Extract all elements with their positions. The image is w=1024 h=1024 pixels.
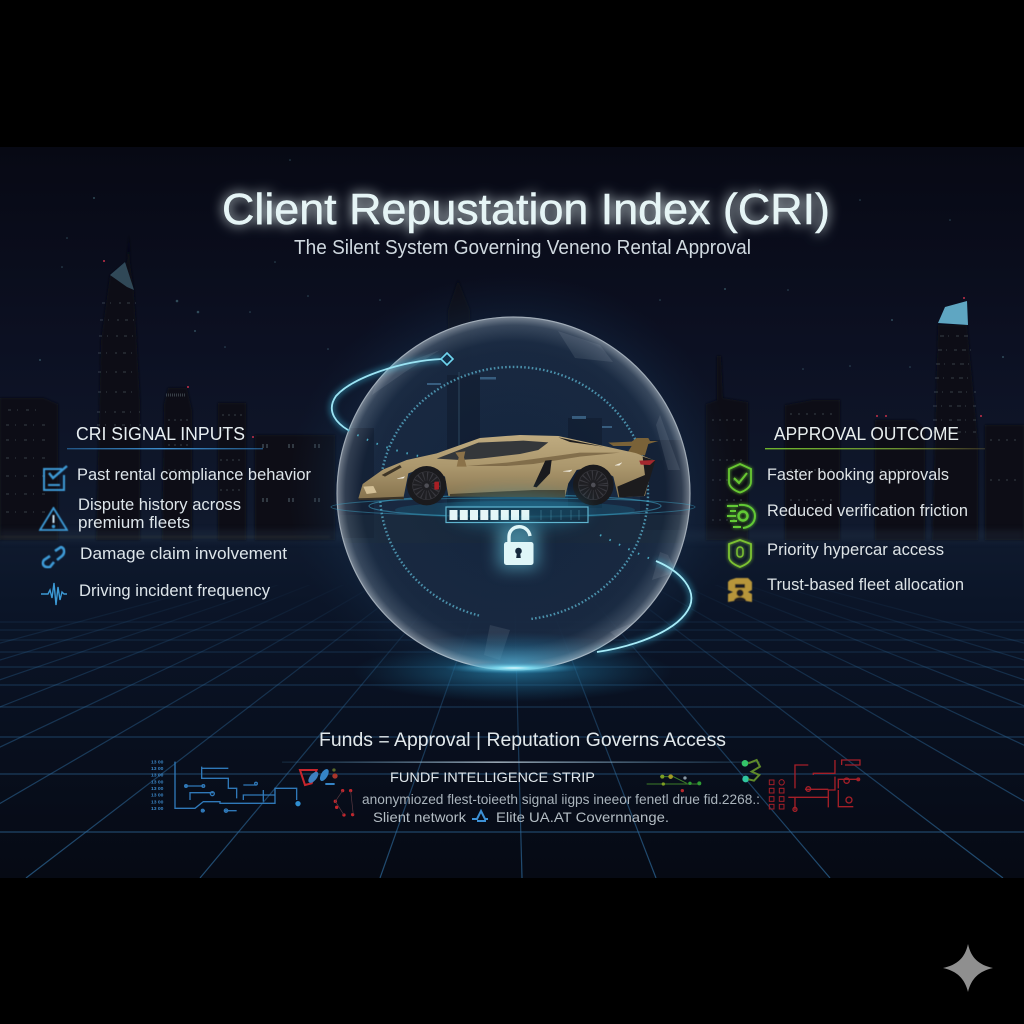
strip text line 2 bbox=[373, 809, 669, 825]
text: damage claim: Damage claim involvement bbox=[80, 545, 287, 563]
sphere interior buildings bbox=[338, 375, 690, 515]
node cluster: green bbox=[647, 760, 760, 792]
text: driving incidents: Driving incident frequency bbox=[79, 582, 271, 600]
city skyline bbox=[0, 234, 1024, 540]
circuit diagram: blue: 13 00 bbox=[151, 759, 164, 765]
car bbox=[358, 435, 658, 505]
circuit diagram: red bbox=[769, 760, 860, 811]
icon: shield check bbox=[729, 464, 751, 492]
strip heading: FUNDF INTELLIGENCE STRIP bbox=[390, 769, 595, 785]
icon: broken chain bbox=[43, 547, 64, 567]
tail light bbox=[639, 460, 655, 465]
text: trust allocation: Trust-based fleet allocation bbox=[767, 576, 964, 594]
dotted scan ring bbox=[380, 367, 648, 619]
sphere base light bbox=[444, 662, 584, 674]
orbit arc: lower right bbox=[597, 561, 691, 652]
icon: trust badge bbox=[728, 578, 752, 602]
holographic platform rings bbox=[331, 495, 695, 519]
icon: warning triangle bbox=[40, 508, 67, 530]
aviation lights bbox=[103, 260, 982, 438]
text: priority access: Priority hypercar access bbox=[767, 541, 944, 559]
circuit diagram: blue: 13 00 bbox=[151, 786, 164, 792]
body highlights bbox=[397, 463, 622, 479]
watermark sparkle bbox=[943, 944, 993, 992]
city lights bbox=[6, 303, 1020, 520]
text: reduced friction: Reduced verification friction bbox=[767, 502, 968, 520]
rear dark section bbox=[617, 457, 655, 497]
sphere base glow bbox=[430, 636, 596, 667]
dotted connection lines bbox=[348, 430, 656, 561]
stars bbox=[39, 159, 1004, 370]
glass sphere bbox=[332, 316, 695, 692]
title: Client Repustation Index (CRI) bbox=[222, 185, 830, 234]
circuit diagram: blue: 13 00 bbox=[151, 779, 164, 785]
right heading: APPROVAL OUTCOME bbox=[774, 424, 959, 444]
tagline: Funds = Approval | Reputation Governs Access bbox=[319, 730, 726, 751]
windows bbox=[437, 441, 548, 460]
subtitle: The Silent System Governing Veneno Rental Approval bbox=[294, 237, 751, 259]
panel: CRI signal inputs bbox=[40, 424, 312, 605]
body crease bbox=[467, 453, 620, 466]
rear wing bbox=[608, 438, 658, 455]
panel: CRI signal inputs: premium fleets bbox=[78, 514, 190, 532]
strip text line 2: Slient network bbox=[373, 809, 467, 825]
sphere city band bbox=[335, 515, 695, 543]
icon: checklist bbox=[44, 466, 67, 490]
panel: approval outcome bbox=[727, 424, 985, 602]
text: compliance: Past rental compliance behavior bbox=[77, 466, 312, 484]
circuit diagram: blue: 13 00 bbox=[151, 773, 164, 779]
floor glow under sphere bbox=[353, 642, 673, 702]
rear wheel bbox=[573, 465, 614, 505]
front vents bbox=[382, 465, 402, 477]
car body bbox=[358, 435, 655, 498]
horizon haze bbox=[0, 530, 1024, 542]
circuit diagram: blue: 13 00 bbox=[151, 799, 164, 805]
central glow behind sphere bbox=[288, 272, 738, 708]
icon: open padlock bbox=[498, 525, 538, 569]
left heading: CRI SIGNAL INPUTS bbox=[76, 424, 245, 444]
icon: pulse wave bbox=[41, 583, 67, 605]
sphere reflections bbox=[372, 331, 680, 660]
scene background panel bbox=[0, 147, 1024, 878]
text: dispute history: Dispute history across bbox=[78, 496, 241, 514]
circuit diagram: blue: 13 00 bbox=[151, 766, 164, 772]
divider under tagline bbox=[282, 762, 760, 763]
strip text line 2: Elite UA.AT Covernnange. bbox=[496, 809, 669, 825]
perspective grid floor bbox=[0, 595, 1024, 878]
icon: speed coin bbox=[727, 505, 755, 528]
front wheel bbox=[407, 466, 446, 505]
strip text line 1: anonymiozed flest-toieeth signal iigps ineeor fenetl drue fid.2268.: bbox=[362, 791, 760, 807]
tower crowns bbox=[110, 262, 968, 325]
orbit arc: upper left bbox=[332, 353, 453, 430]
circuit diagram: blue bbox=[151, 759, 301, 812]
circuit diagram: blue: 13 00 bbox=[151, 806, 164, 812]
side air intake bbox=[533, 460, 552, 487]
text: faster booking: Faster booking approvals bbox=[767, 466, 949, 484]
circuit diagram: blue: 13 00 bbox=[151, 793, 164, 799]
icon: shield badge bbox=[729, 540, 751, 567]
molecule cluster: red and blue bbox=[300, 768, 354, 817]
side mirror bbox=[455, 451, 467, 467]
progress bar bbox=[446, 492, 588, 528]
